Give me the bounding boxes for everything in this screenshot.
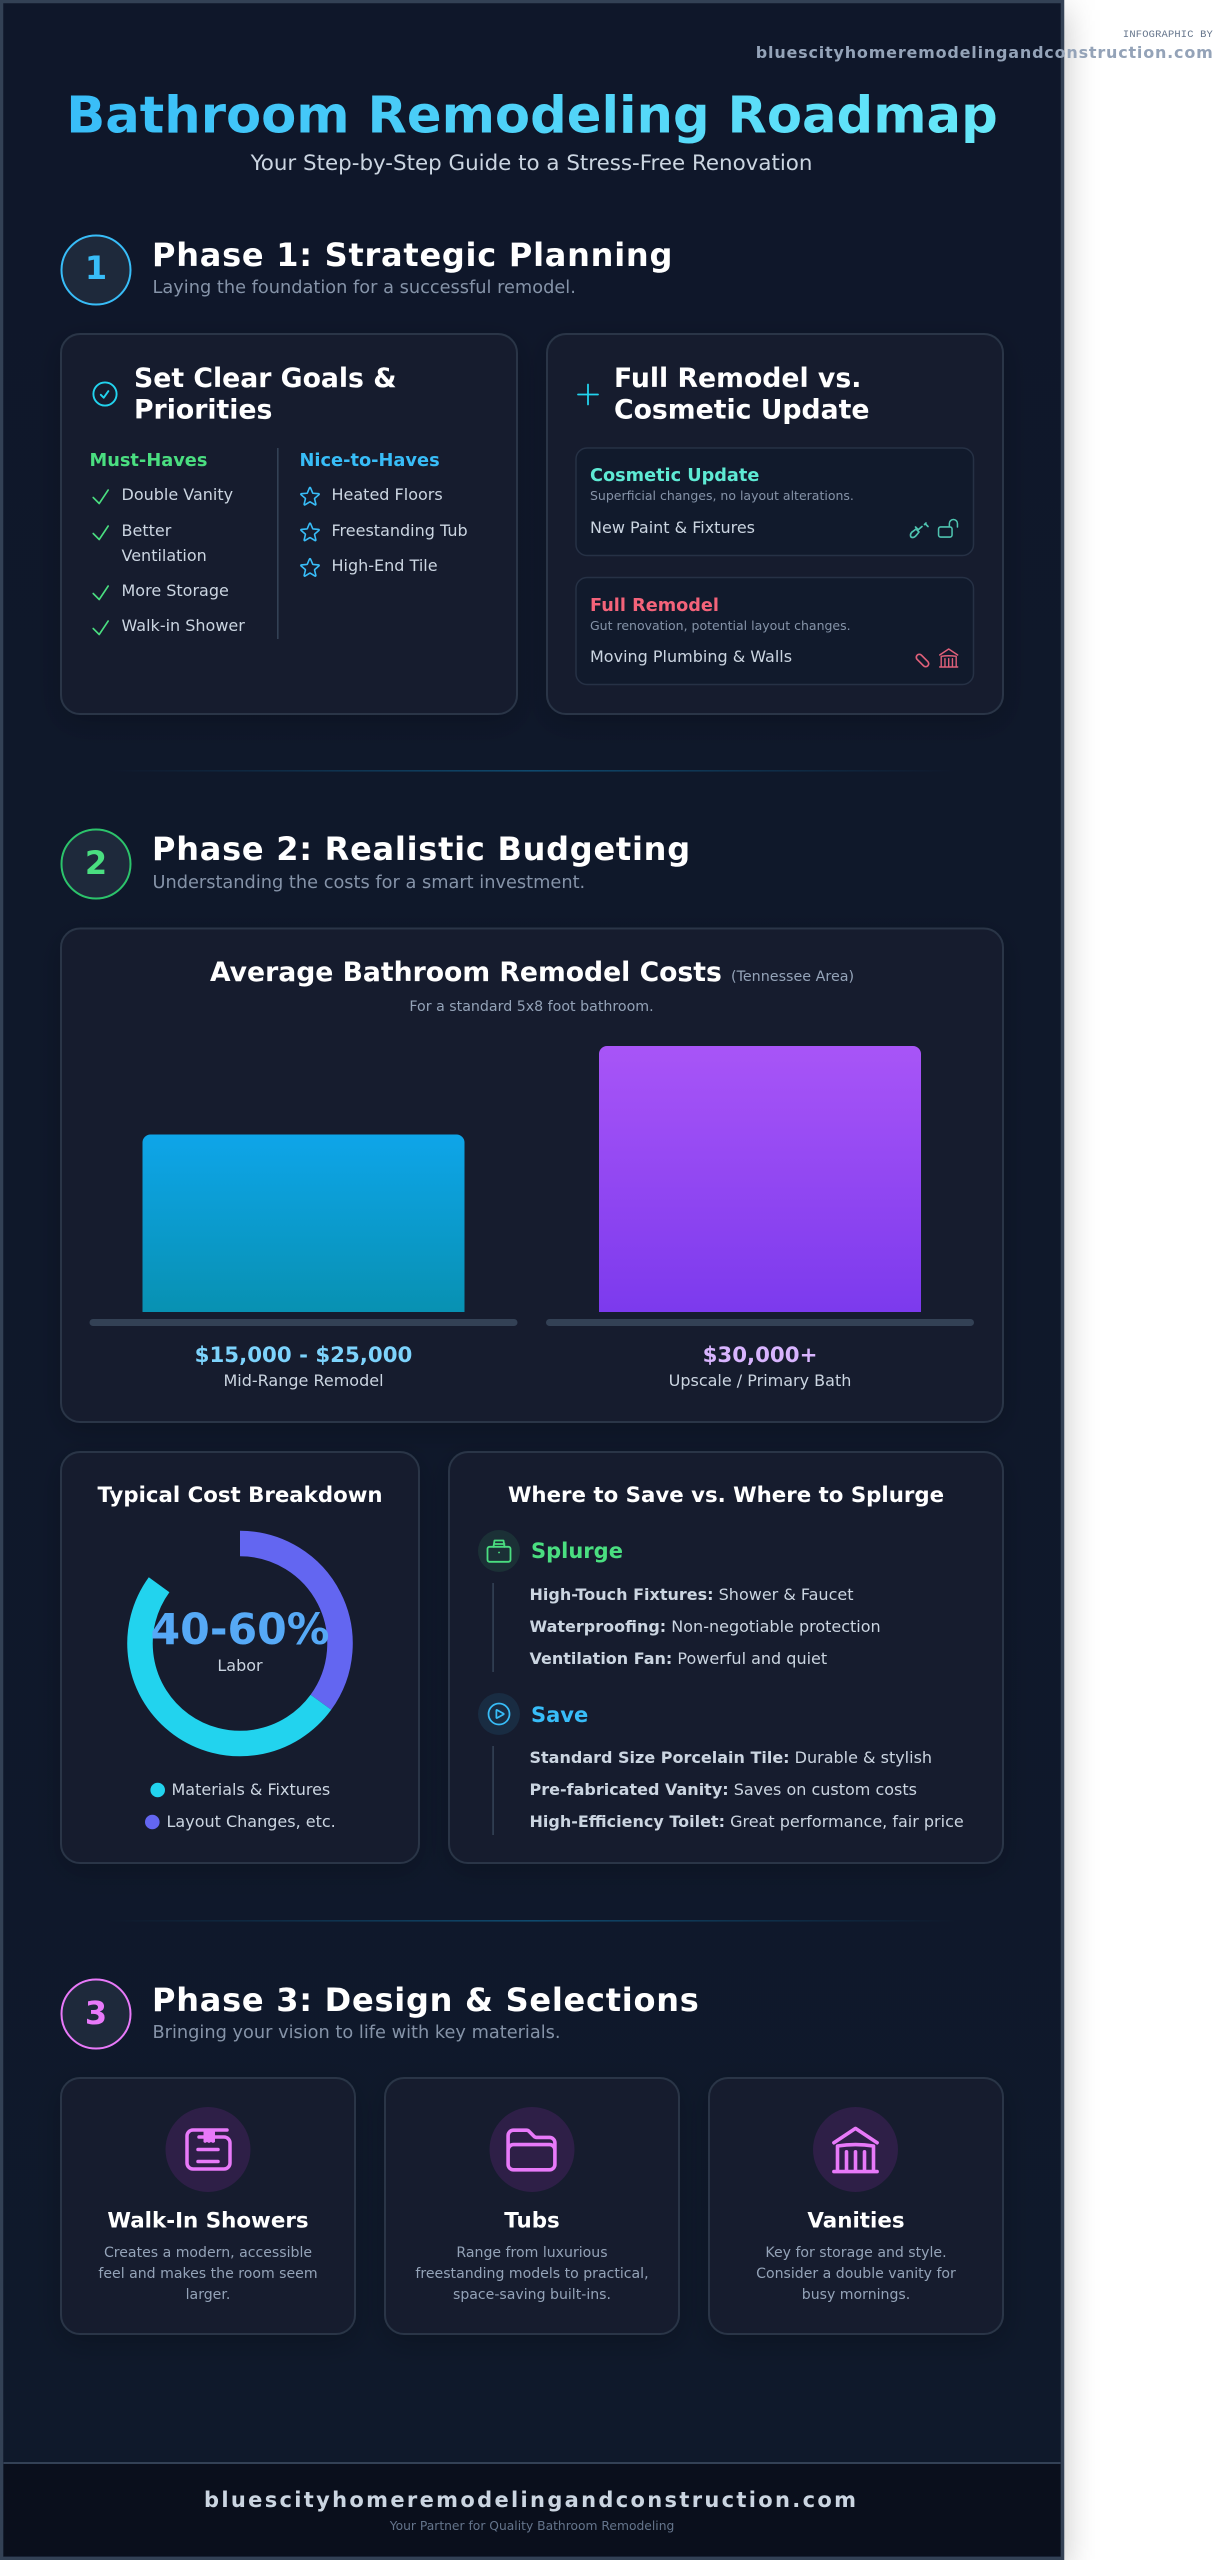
panel: walk-in showers: feel and makes the room seem (98, 2266, 318, 2282)
panel: tubs: Range from luxurious (456, 2245, 608, 2261)
footer: Your Partner for Quality Bathroom Remodeling (389, 2519, 674, 2533)
heading: Where to Save vs. Where to Splurge (508, 1483, 944, 1508)
donut chart (140, 1544, 340, 1744)
nice-to-haves list: Nice-to-Haves (300, 450, 440, 471)
icon: check circle (93, 382, 117, 406)
phase 1 heading: Laying the foundation for a successful remodel. (152, 278, 576, 298)
full remodel box (576, 578, 974, 684)
panel: average costs chart (61, 928, 1003, 1422)
icon: splurge (488, 1540, 510, 1562)
panel: cost breakdown: Labor (217, 1656, 263, 1675)
icon: plus (578, 384, 598, 404)
full remodel box: Gut renovation, potential layout changes. (590, 618, 851, 633)
panel: vanities: busy mornings. (802, 2287, 910, 2303)
panel: vanities: Vanities (807, 2208, 905, 2234)
icon: open lock (939, 520, 957, 537)
panel: vanities: Consider a double vanity for (756, 2266, 956, 2282)
header: title: Bathroom Remodeling Roadmap (66, 86, 998, 146)
phase 3 heading: Bringing your vision to life with key materials. (152, 2023, 561, 2043)
save group: Pre-fabricated Vanity: Saves on custom costs (530, 1780, 917, 1799)
card title: Priorities (134, 394, 272, 426)
header: subtitle: Your Step-by-Step Guide to a Stress-Free Renovation (250, 151, 812, 176)
phase 3 heading (62, 1980, 700, 2048)
panel: save vs splurge (449, 1452, 1003, 1863)
phase 3 heading: 3 (85, 1994, 107, 2032)
must-haves list: More Storage (122, 581, 229, 600)
full remodel box: Full Remodel (590, 596, 719, 616)
phase 1 heading: 1 (85, 249, 107, 287)
watermark: INFOGRAPHIC BY (1123, 29, 1214, 41)
cosmetic update box: New Paint & Fixtures (590, 518, 755, 537)
splurge group: Waterproofing: Non-negotiable protection (530, 1617, 881, 1636)
panel: set clear goals (61, 334, 517, 714)
icon: play circle (489, 1704, 510, 1725)
chart subtitle: For a standard 5x8 foot bathroom. (409, 999, 654, 1015)
cosmetic update box (576, 448, 974, 556)
save group: Standard Size Porcelain Tile: Durable & stylish (530, 1748, 932, 1767)
bar: mid-range: $15,000 - $25,000 (195, 1343, 412, 1368)
nice-to-haves list: High-End Tile (332, 556, 438, 575)
bar: upscale: Upscale / Primary Bath (669, 1371, 851, 1390)
save group: Save (531, 1703, 588, 1727)
phase 1 heading: Phase 1: Strategic Planning (152, 236, 673, 274)
bar: mid-range (90, 1134, 518, 1390)
splurge group: Ventilation Fan: Powerful and quiet (530, 1649, 827, 1668)
panel: walk-in showers: Walk-In Showers (107, 2208, 309, 2234)
save group: High-Efficiency Toilet: Great performance, fair price (530, 1812, 964, 1831)
panel: walk-in showers (61, 2078, 355, 2334)
watermark: bluescityhomeremodelingandconstruction.com (756, 43, 1213, 62)
phase 1 heading (62, 236, 673, 304)
bar: upscale: $30,000+ (703, 1343, 817, 1368)
nice-to-haves list: Freestanding Tub (332, 521, 468, 540)
footer: bluescityhomeremodelingandconstruction.com (204, 2488, 856, 2512)
save group (478, 1693, 964, 1835)
panel: walk-in showers: larger. (186, 2287, 230, 2303)
footer (4, 2462, 1060, 2556)
icon: brush (910, 523, 928, 538)
phase 2 heading: 2 (85, 844, 107, 882)
panel: walk-in showers: Creates a modern, accessible (104, 2245, 312, 2261)
icon: bank (940, 649, 958, 667)
panel: vanities (709, 2078, 1003, 2334)
section divider (60, 1920, 1004, 1922)
watermark (756, 29, 1214, 62)
phase 2 heading: Understanding the costs for a smart investment. (152, 873, 585, 893)
panel: tubs: space-saving built-ins. (453, 2287, 611, 2303)
bar: mid-range: Mid-Range Remodel (223, 1371, 384, 1390)
splurge group (478, 1530, 881, 1672)
legend: Layout Changes, etc. (166, 1812, 336, 1831)
cosmetic update box: Superficial changes, no layout alterations. (590, 488, 854, 503)
phase 2 heading: Phase 2: Realistic Budgeting (152, 830, 691, 868)
icon: vanity (834, 2128, 877, 2172)
panel: tubs: Tubs (504, 2208, 560, 2234)
full remodel box: Moving Plumbing & Walls (590, 647, 792, 666)
card title: Set Clear Goals & (134, 363, 397, 394)
cosmetic update box: Cosmetic Update (590, 466, 759, 486)
must-haves list: Ventilation (122, 546, 207, 565)
chart title: Average Bathroom Remodel Costs (210, 957, 722, 988)
heading: Typical Cost Breakdown (97, 1483, 383, 1508)
nice-to-haves list: Heated Floors (332, 485, 443, 504)
must-haves list: Double Vanity (122, 485, 233, 504)
panel: full remodel vs cosmetic (547, 334, 1003, 714)
phase 2 heading (62, 830, 691, 898)
splurge group: Splurge (531, 1539, 623, 1563)
card title: Cosmetic Update (614, 394, 869, 426)
card title: Full Remodel vs. (614, 363, 861, 394)
must-haves list: Must-Haves (90, 450, 207, 471)
section divider (60, 770, 1004, 772)
panel: cost breakdown (61, 1452, 419, 1863)
icon: shower (187, 2129, 230, 2169)
icon: pill (915, 653, 930, 668)
must-haves list: Walk-in Shower (122, 616, 245, 635)
donut centre value: 40-60% (151, 1605, 329, 1655)
icon: folder (508, 2130, 555, 2170)
phase 3 heading: Phase 3: Design & Selections (152, 1981, 700, 2019)
panel: vanities: Key for storage and style. (765, 2245, 947, 2261)
bar: upscale (546, 1046, 974, 1390)
legend (145, 1780, 336, 1831)
must-haves list: Better (122, 521, 172, 540)
must-haves list (90, 450, 245, 635)
panel: tubs (385, 2078, 679, 2334)
panel: average costs chart: (Tennessee Area) (731, 969, 854, 985)
panel: tubs: freestanding models to practical, (415, 2266, 649, 2282)
nice-to-haves list (300, 450, 468, 576)
splurge group: High-Touch Fixtures: Shower & Faucet (530, 1585, 853, 1604)
legend: Materials & Fixtures (172, 1780, 330, 1799)
